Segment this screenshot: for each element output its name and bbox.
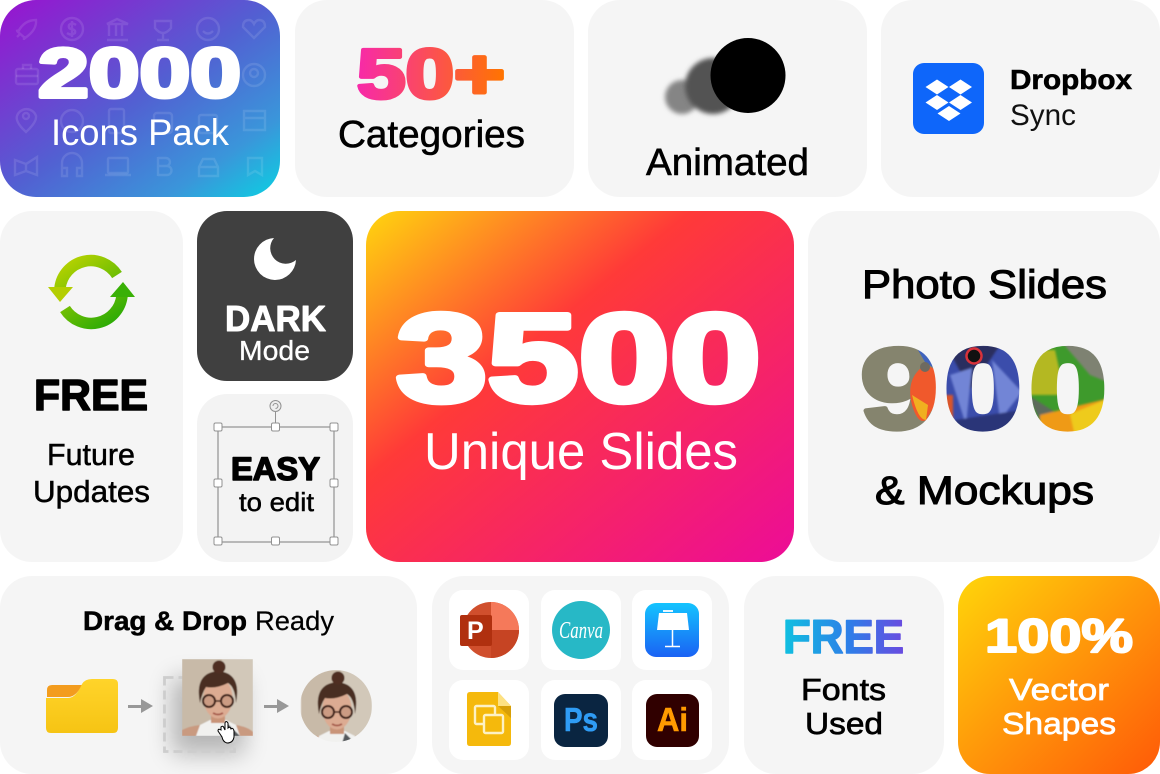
label: FREE: FREE	[34, 371, 148, 420]
label: Fonts: Fonts	[801, 672, 886, 707]
icon: hand cursor	[218, 722, 234, 743]
icon: dragged photo with drop zone	[164, 659, 253, 754]
background icon grid	[15, 18, 265, 176]
arrow: photo to circle	[264, 699, 289, 713]
label: Updates: Updates	[33, 474, 150, 509]
numeral: 900 photo-filled	[862, 346, 1104, 432]
panel: app icons	[432, 576, 729, 774]
label: Icons Pack: Icons Pack	[51, 112, 229, 153]
label: Used: Used	[805, 706, 883, 741]
label: & Mockups: & Mockups	[875, 469, 1094, 513]
image: cropped round photo	[301, 670, 372, 747]
label: DARK: DARK	[225, 298, 326, 339]
label: Unique Slides: Unique Slides	[424, 423, 738, 481]
icon: dropbox	[913, 63, 984, 134]
panel: free future updates	[0, 211, 183, 562]
label: Sync: Sync	[1010, 99, 1076, 132]
icon: photoshop	[554, 694, 608, 747]
panel: easy to edit	[197, 394, 353, 562]
icon: animated ball trail	[665, 38, 786, 114]
panel: 3500 unique slides	[366, 211, 794, 562]
heading: 3500: 3500	[396, 289, 761, 428]
icon: refresh arrows	[48, 261, 135, 323]
heading: 2000: 2000	[38, 34, 241, 112]
panel: 50+ categories	[295, 0, 574, 197]
icon: folder	[46, 679, 118, 733]
arrow: folder to photo	[128, 699, 153, 713]
icon: selection box with handles	[214, 400, 338, 545]
label: Animated: Animated	[646, 142, 809, 184]
heading: FREE: FREE	[783, 610, 904, 663]
panel: photo slides	[808, 211, 1160, 562]
icon: google slides	[467, 692, 511, 746]
heading: Drag & Drop Ready	[83, 606, 335, 636]
heading: 50+: 50+	[357, 35, 505, 113]
label: Future: Future	[47, 437, 135, 472]
icon: canva: Canva	[559, 618, 603, 644]
icon: powerpoint: P	[467, 617, 484, 645]
label: Shapes: Shapes	[1002, 706, 1116, 741]
panel: free fonts	[744, 576, 944, 774]
label: Dropbox: Dropbox	[1010, 64, 1132, 95]
heading: Drag & Drop Ready: Drag & Drop	[83, 606, 247, 636]
heading: Drag & Drop Ready: Ready	[255, 606, 335, 636]
icon: keynote	[645, 603, 699, 657]
icon: illustrator: Ai	[657, 701, 688, 738]
label: Categories: Categories	[338, 114, 525, 156]
panel: drag and drop	[0, 576, 417, 774]
label: to edit: to edit	[239, 487, 315, 517]
icon: moon	[254, 238, 296, 280]
label: EASY: EASY	[231, 451, 320, 487]
app tiles	[449, 590, 712, 760]
icon: canva	[552, 601, 610, 659]
heading: 100%: 100%	[985, 609, 1133, 662]
panel: dropbox sync	[881, 0, 1160, 197]
icon: photoshop: Ps	[564, 701, 598, 738]
panel: animated	[588, 0, 867, 197]
panel: vector shapes	[958, 576, 1160, 774]
label: Vector: Vector	[1009, 672, 1109, 707]
label: Mode: Mode	[239, 335, 310, 366]
panel: dark mode	[197, 211, 353, 381]
icon: powerpoint	[460, 602, 519, 658]
icon: illustrator	[646, 694, 699, 747]
panel: 2000 icons pack	[0, 0, 280, 197]
label: Photo Slides: Photo Slides	[862, 263, 1107, 307]
